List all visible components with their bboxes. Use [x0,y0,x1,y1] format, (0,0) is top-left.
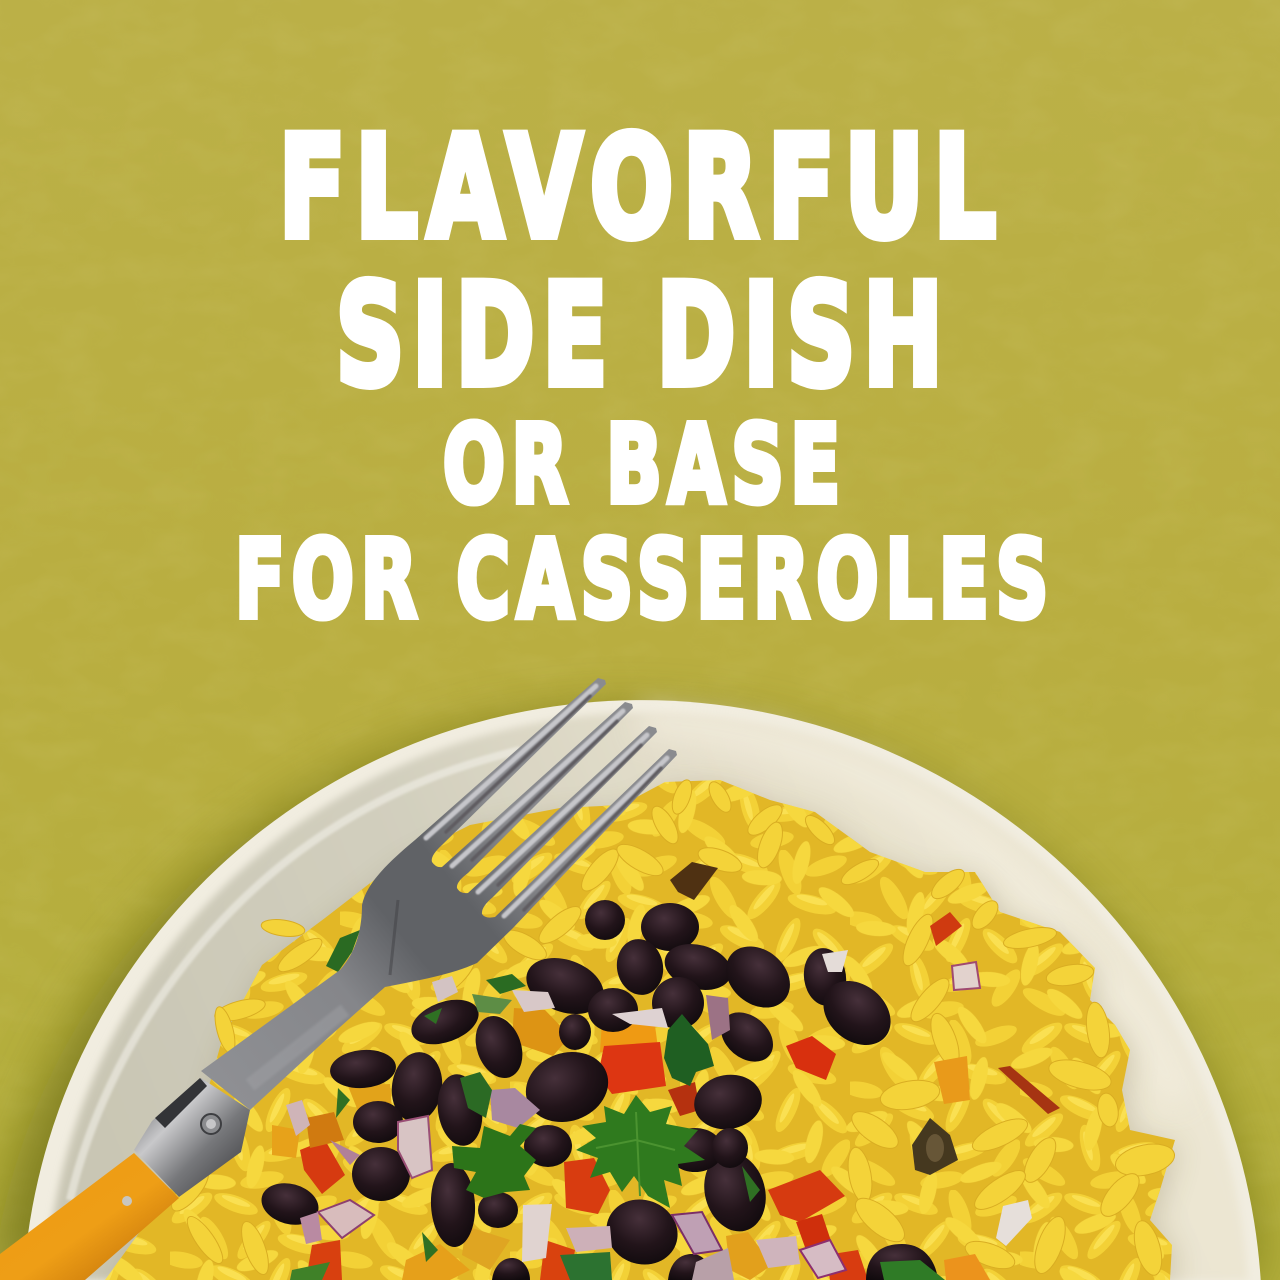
fork tine highlights [426,686,667,916]
title line: SIDE DISH: SIDE DISH [336,256,943,417]
dark roasted vegetable pieces [670,862,958,1175]
rice grains along mound edge [166,777,1177,1278]
title: flavorful side dish or base for casseroles [235,108,1048,642]
fork bolster [134,1078,250,1197]
title line: FLAVORFUL: FLAVORFUL [279,108,996,269]
white bowl [23,700,1261,1280]
title line: OR BASE: OR BASE [443,402,840,527]
red onion pieces [286,950,1032,1280]
fork head and neck [201,678,677,1110]
black beans [257,900,938,1280]
cilantro leaves [290,930,945,1280]
plate shadow [0,713,1260,1280]
peppers [272,912,1060,1280]
orange fork handle [0,1153,179,1280]
rice mound [105,777,1179,1280]
title line: FOR CASSEROLES: FOR CASSEROLES [235,517,1048,642]
fork [0,678,677,1280]
